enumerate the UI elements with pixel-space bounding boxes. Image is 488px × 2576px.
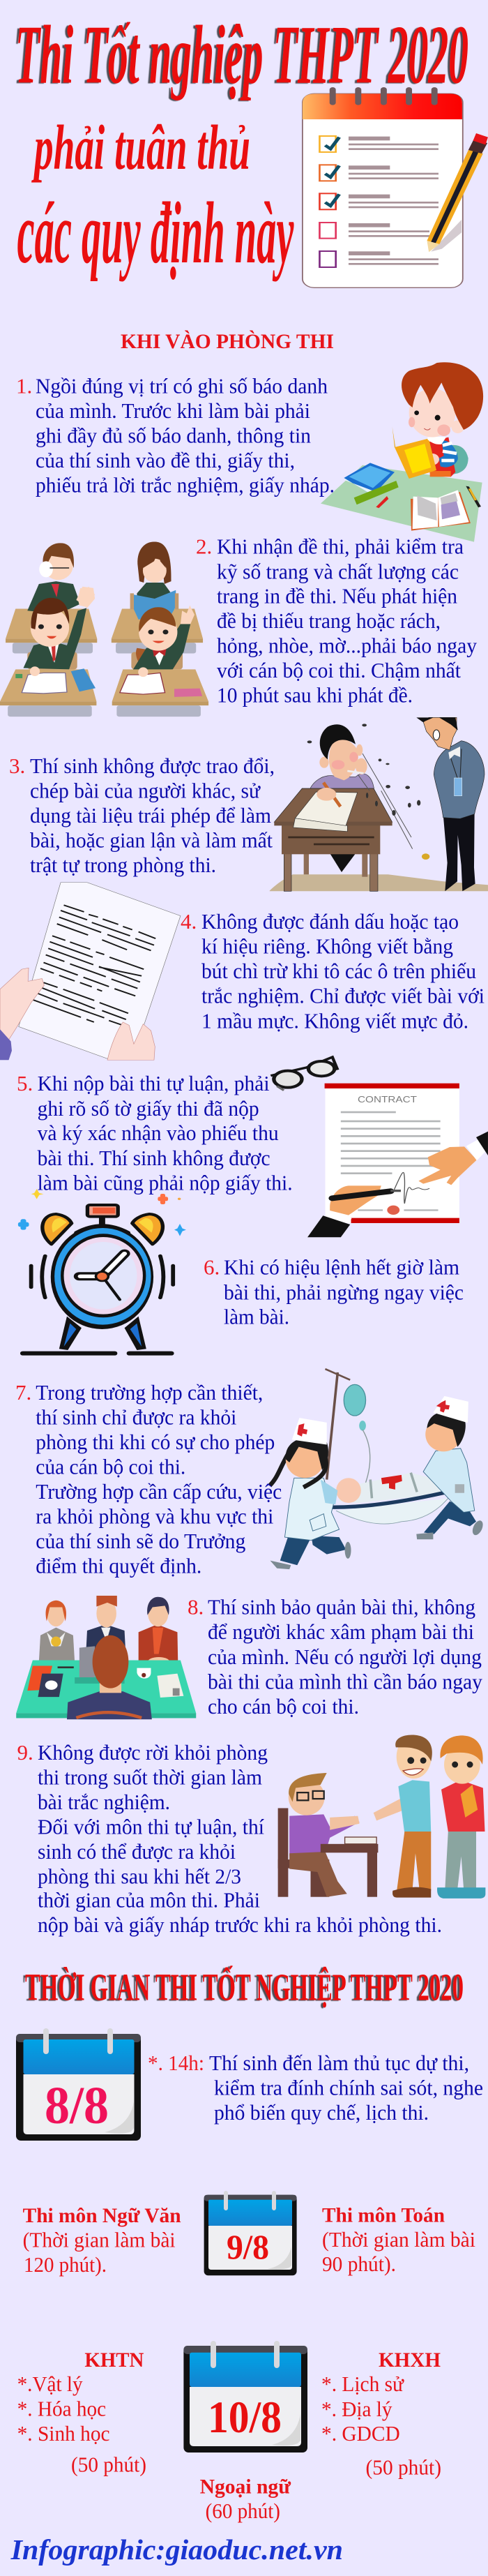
text block: KHXH: KHXH — [379, 2349, 441, 2372]
illustration: student cheating with invigilator — [270, 717, 488, 891]
title — [15, 8, 468, 282]
text block: rule 9: phòng thi sau khi hết 2/3 — [38, 1864, 241, 1888]
text block: rule 2: 10 phút sau khi phát đề. — [217, 682, 413, 707]
text block: Toán: (Thời gian làm bài — [322, 2227, 475, 2252]
text block: rule 3 — [9, 754, 275, 877]
text block: KHTN: *.Vật lý — [17, 2372, 83, 2396]
text block: rule 5: Khi nộp bài thi tự luận, phải — [38, 1071, 270, 1095]
text block: rule 1: phiếu trả lời trắc nghiệm, giấy nháp. — [36, 473, 335, 497]
calendar: 8/8 — [16, 2031, 141, 2141]
text block: rule 9: thi trong suốt thời gian làm — [38, 1765, 262, 1790]
text block: Ngữ Văn: 120 phút). — [24, 2252, 107, 2277]
text block: rule 6: Khi có hiệu lệnh hết giờ làm — [224, 1255, 459, 1280]
text block: rule 4: bút chì trừ khi tô các ô trên phiếu — [201, 959, 476, 983]
text block: rule 5: và ký xác nhận vào phiếu thu — [38, 1121, 279, 1145]
text block: KHXH: (50 phút) — [365, 2455, 441, 2480]
text block: rule 9: nộp bài và giấy nháp trước khi ra khỏi phòng thi. — [38, 1912, 442, 1937]
text block: KHXH: *. GDCD — [321, 2421, 400, 2446]
text block: rule 4: 4. — [181, 909, 197, 934]
calendar: 9/8: 9/8 — [227, 2227, 269, 2266]
text block: KHTN — [17, 2349, 146, 2477]
text block: rule 2: Khi nhận đề thi, phải kiểm tra — [217, 534, 464, 559]
text block: rule 8: bài thi của mình thì cần báo ngay — [208, 1669, 482, 1694]
text block: rule 3: bài, hoặc gian lận và làm mất — [30, 828, 273, 853]
heading: khi vào phòng thi: KHI VÀO PHÒNG THI — [121, 330, 334, 353]
text block: rule 1: 1. — [16, 373, 32, 398]
text block: rule 2: hỏng, nhòe, mờ...phải báo ngay — [217, 634, 477, 658]
text block: KHXH: *. Lịch sử — [321, 2372, 404, 2396]
text block: rule 6: làm bài. — [224, 1305, 289, 1329]
text block: 14h check-in: Thí sinh đến làm thủ tục dự thi, — [209, 2051, 469, 2075]
text block: rule 5: làm bài cũng phải nộp giấy thi. — [38, 1171, 293, 1195]
text block: rule 9: 9. — [17, 1740, 33, 1765]
text block: rule 2: 2. — [196, 534, 212, 559]
text block: rule 4 — [181, 909, 485, 1033]
text block: rule 8: cho cán bộ coi thi. — [208, 1694, 359, 1718]
text block: rule 5: ghi rõ số tờ giấy thi đã nộp — [38, 1096, 259, 1121]
calendar: 10/8: 10/8 — [208, 2392, 282, 2443]
text block: rule 1 — [16, 373, 335, 497]
text block: 14h check-in: phổ biến quy chế, lịch thi. — [214, 2100, 429, 2125]
illustration: hands holding exam paper — [0, 883, 181, 1060]
text block: rule 9: bài trắc nghiệm. — [38, 1790, 170, 1814]
text block: rule 9: sinh có thể được ra khỏi — [38, 1839, 236, 1864]
text block: rule 2 — [196, 534, 477, 707]
text block: rule 5: 5. — [17, 1071, 33, 1095]
text block: rule 7: 7. — [15, 1380, 31, 1405]
text block: Ngoại ngữ: (60 phút) — [206, 2499, 280, 2523]
text block: rule 3: trật tự trong phòng thi. — [30, 853, 216, 877]
text block: rule 7 — [15, 1380, 282, 1578]
text block: KHTN: KHTN — [84, 2349, 144, 2372]
text block: Ngữ Văn — [23, 2204, 181, 2277]
text block: rule 2: đề bị thiếu trang hoặc rách, — [217, 608, 441, 633]
text block: rule 6 — [204, 1255, 464, 1329]
text block: rule 7: Trường hợp cần cấp cứu, việc — [36, 1479, 282, 1504]
text block: rule 2: kỹ số trang và chất lượng các — [217, 559, 459, 583]
text block: 14h check-in: *. 14h: — [148, 2051, 204, 2075]
text block: Ngữ Văn: Thi môn Ngữ Văn — [23, 2204, 181, 2227]
text block: rule 8: Thí sinh bảo quản bài thi, không — [208, 1594, 475, 1619]
text block: rule 1: của mình. Trước khi làm bài phải — [36, 398, 310, 423]
text block: rule 9: Đối với môn thi tự luận, thí — [38, 1815, 264, 1839]
text block: rule 4: kí hiệu riêng. Không viết bằng — [201, 934, 453, 959]
text block: rule 2: trang in đề thi. Nếu phát hiện — [217, 583, 457, 608]
text block: rule 1: Ngồi đúng vị trí có ghi số báo danh — [36, 373, 328, 398]
text block: Toán: Thi môn Toán — [322, 2203, 445, 2227]
text block: rule 6: bài thi, phải ngừng ngay việc — [224, 1280, 464, 1304]
illustration: signing a contract — [307, 1084, 488, 1237]
text block: KHTN: *. Sinh học — [17, 2421, 110, 2446]
footer credit: Infographic:giaoduc.net.vn — [10, 2533, 343, 2566]
text block: rule 4: 1 mầu mực. Không viết mực đỏ. — [201, 1008, 468, 1033]
calendar: 10/8 — [183, 2344, 307, 2453]
text block: rule 8: 8. — [188, 1594, 204, 1619]
text block: rule 5 — [17, 1071, 293, 1195]
icon: alarm clock — [18, 1189, 186, 1356]
text block: KHXH: *. Địa lý — [321, 2397, 392, 2421]
text block: rule 7: thí sinh chỉ được ra khỏi — [36, 1405, 237, 1429]
text block: 14h check-in — [148, 2051, 483, 2125]
illustration: students raising hands at desks — [0, 541, 208, 717]
text block: rule 9: thời gian của môn thi. Phải — [38, 1887, 260, 1912]
text block: rule 1: ghi đầy đủ số báo danh, thông tin — [36, 423, 311, 448]
text block: rule 8 — [188, 1594, 482, 1718]
text block: rule 6: 6. — [204, 1255, 220, 1280]
text block: rule 9: Không được rời khỏi phòng — [38, 1740, 268, 1765]
text block: Ngữ Văn: (Thời gian làm bài — [23, 2228, 176, 2252]
text block: rule 1: của thí sinh vào đề thi, giấy thi, — [36, 448, 295, 472]
text block: rule 9 — [17, 1740, 442, 1937]
calendar: 9/8 — [204, 2193, 297, 2275]
text block: rule 3: Thí sinh không được trao đổi, — [30, 754, 275, 778]
icon: glasses — [270, 1057, 337, 1091]
illustration: students leaving the exam room — [278, 1735, 485, 1899]
text block: rule 7: của cán bộ coi thi. — [36, 1454, 185, 1479]
text block: rule 3: dụng tài liệu trái phép để làm — [30, 803, 271, 828]
text block: KHTN: (50 phút) — [71, 2453, 146, 2477]
text block: 14h check-in: kiểm tra đính chính sai sót, nghe — [214, 2076, 483, 2100]
text block: rule 4: Không được đánh dấu hoặc tạo — [201, 909, 459, 934]
icon: checklist notepad with pencil — [303, 89, 488, 287]
text block: rule 7: Trong trường hợp cần thiết, — [36, 1380, 263, 1405]
title: phải tuân thủ — [31, 112, 250, 183]
text block: rule 8: để người khác xâm phạm bài thi — [208, 1619, 474, 1644]
calendar: 8/8: 8/8 — [45, 2076, 109, 2135]
text block: Ngoại ngữ — [200, 2475, 291, 2523]
text block: rule 7: phòng thi khi có sự cho phép — [36, 1430, 275, 1454]
text block: rule 7: của thí sinh sẽ do Trưởng — [36, 1529, 245, 1553]
text block: rule 3: 3. — [9, 754, 25, 778]
text block: rule 7: điểm thi quyết định. — [36, 1553, 201, 1578]
illustration: nurses carrying stretcher — [270, 1369, 485, 1569]
text block: rule 2: với cán bộ coi thi. Chậm nhất — [217, 658, 461, 682]
icon: boy reading at table — [321, 362, 483, 542]
illustration: signing a contract: CONTRACT — [358, 1094, 417, 1104]
text block: rule 5: bài thi. Thí sinh không được — [38, 1146, 270, 1170]
text block: Toán — [322, 2203, 475, 2276]
text block: KHXH — [321, 2349, 441, 2480]
text block: rule 7: ra khỏi phòng và khu vực thi — [36, 1504, 274, 1528]
illustration: group at meeting table — [16, 1596, 196, 1719]
text block: Ngoại ngữ: Ngoại ngữ — [200, 2475, 291, 2498]
text block: rule 8: của mình. Nếu có người lợi dụng — [208, 1645, 482, 1669]
text block: Toán: 90 phút). — [322, 2252, 396, 2276]
text block: rule 3: chép bài của người khác, sử — [30, 778, 261, 802]
text block: KHTN: *. Hóa học — [17, 2397, 106, 2421]
